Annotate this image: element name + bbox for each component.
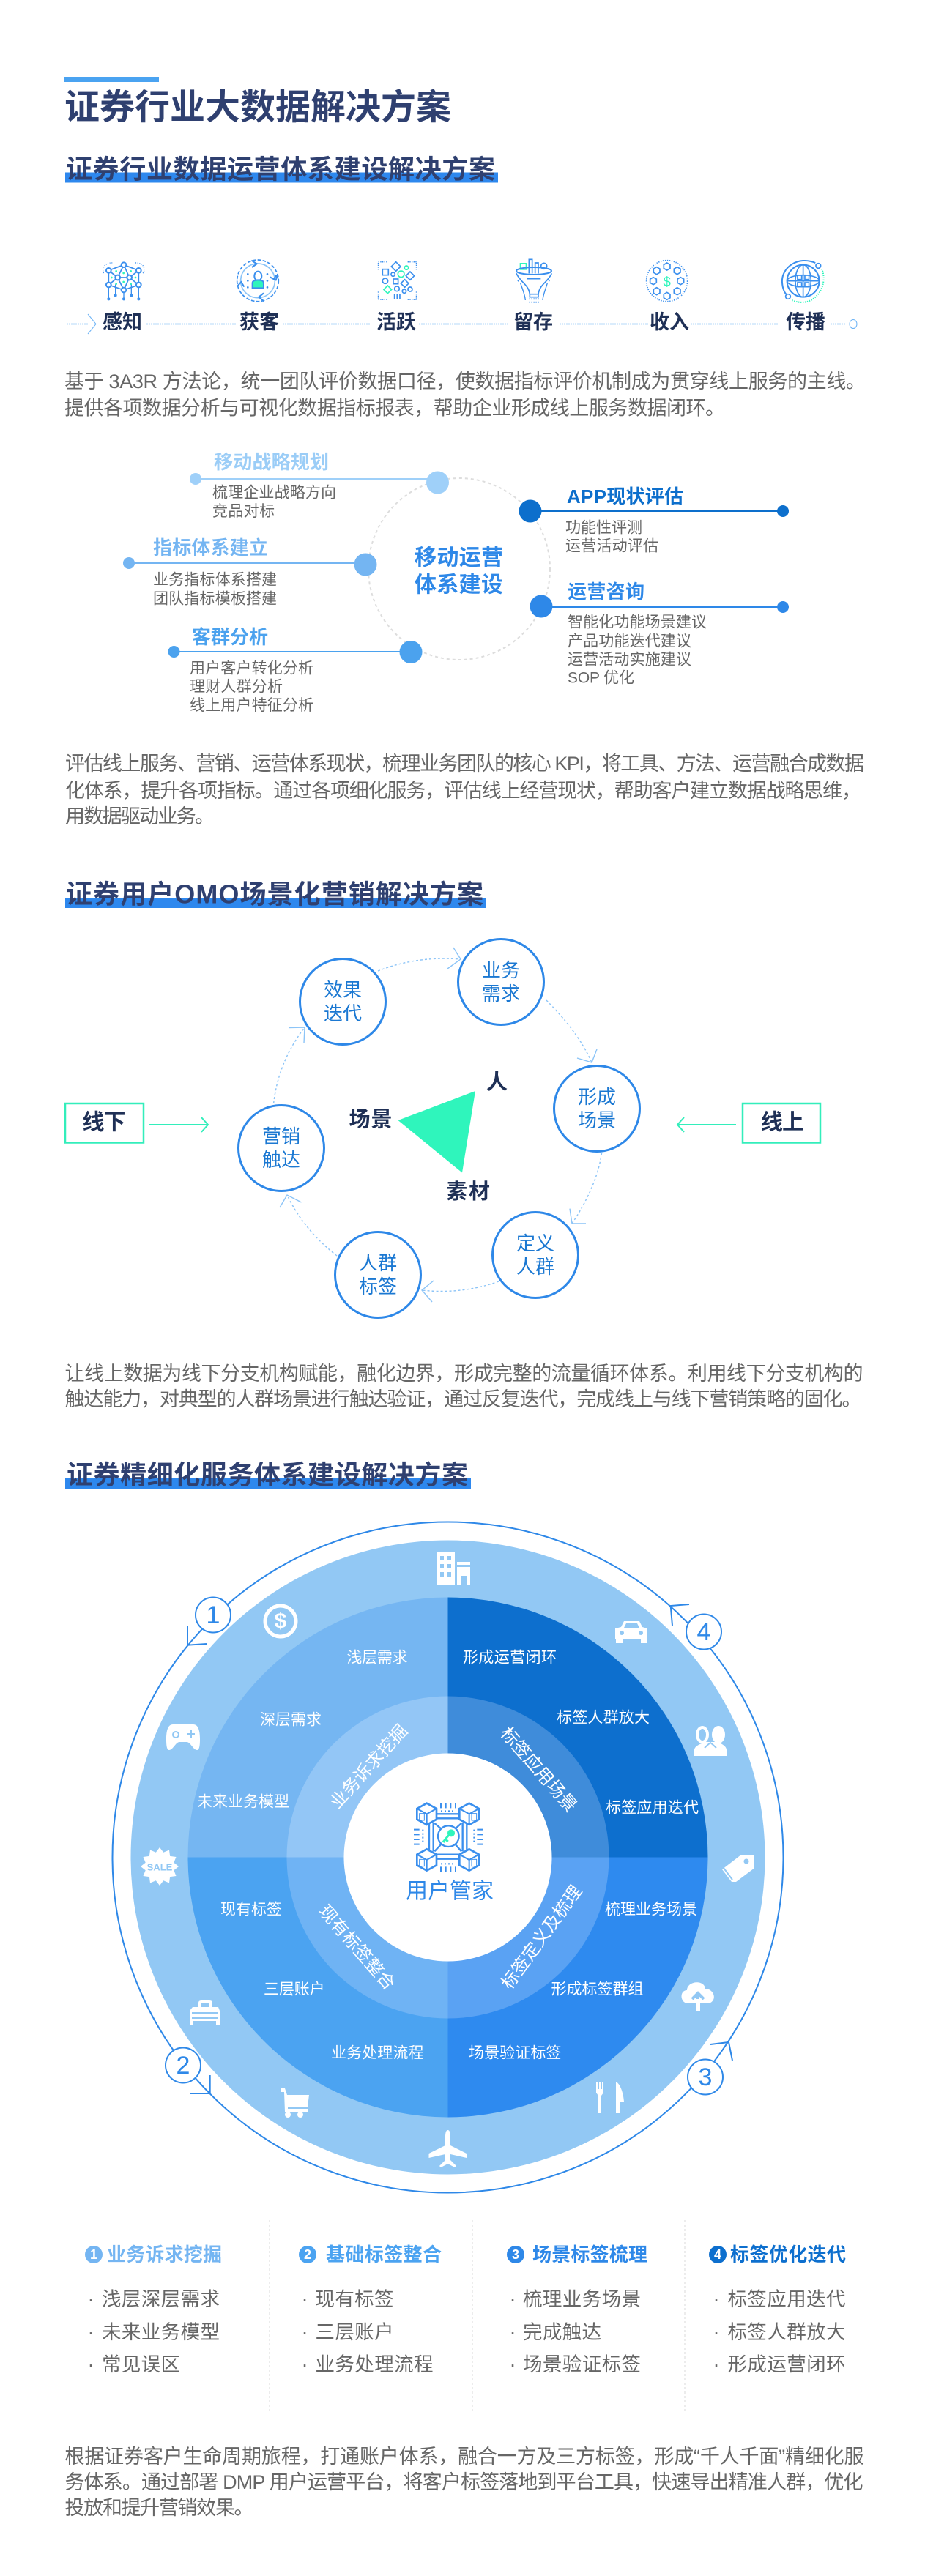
- offline box: 线下: [82, 1110, 126, 1135]
- center triangle: [398, 1091, 475, 1173]
- icon: cloud upload: [681, 1982, 714, 2011]
- white center: [344, 1753, 552, 1961]
- quadrant item labels: 标签应用迭代: [606, 1800, 699, 1816]
- step: 人群标签: 人群: [359, 1252, 397, 1274]
- column 4: ·: [713, 2288, 719, 2310]
- column 2: ·: [302, 2321, 308, 2343]
- step badge 2: 2: [177, 2052, 190, 2080]
- step: 形成场景: 场景: [578, 1109, 616, 1131]
- node: 移动战略规划: 竞品对标: [212, 503, 275, 520]
- column 3: ·: [510, 2321, 516, 2343]
- inner ring labels: [315, 1721, 586, 1994]
- quadrant item labels: 未来业务模型: [197, 1794, 289, 1810]
- icon: tag: [722, 1855, 754, 1882]
- node: 运营咨询: 产品功能迭代建议: [568, 633, 691, 650]
- column 4: [709, 2244, 846, 2375]
- node: 运营咨询: SOP 优化: [568, 669, 634, 687]
- center labels: [349, 1071, 508, 1204]
- step: 业务需求: 业务: [482, 959, 520, 981]
- node: 移动战略规划: [190, 451, 449, 520]
- node: APP现状评估: APP现状评估: [567, 485, 683, 507]
- node: APP现状评估: 运营活动评估: [565, 537, 658, 555]
- quadrant item labels: 形成运营闭环: [463, 1649, 557, 1667]
- step: 营销触达: 触达: [262, 1149, 300, 1171]
- column 2: ·: [302, 2288, 308, 2310]
- quadrant item labels: 浅层需求: [347, 1649, 407, 1667]
- quadrant item labels: 场景验证标签: [469, 2044, 561, 2062]
- dashed ring: [368, 478, 550, 660]
- icon: user cycle: [237, 260, 278, 302]
- node: APP现状评估: 功能性评测: [565, 520, 642, 536]
- inner ring labels: 标签应用场景: [497, 1724, 580, 1816]
- node: 指标体系建立: 团队指标模板搭建: [153, 590, 277, 608]
- column 4: 标签应用迭代: [728, 2288, 845, 2310]
- step: 效果迭代: 效果: [324, 979, 362, 1001]
- paragraph 4: 根据证券客户生命周期旅程，打通账户体系，融合一方及三方标签，形成“千人千面”精细化服: [64, 2446, 864, 2468]
- timeline dashed connector: [67, 314, 857, 334]
- step: 人群标签: 标签: [359, 1276, 397, 1298]
- column 1: [85, 2244, 222, 2375]
- icon: key hub: [414, 1803, 483, 1872]
- icon: activity shapes: [379, 262, 417, 299]
- outer ring line: [113, 1522, 784, 2192]
- icon: sale badge: SALE: [147, 1861, 173, 1873]
- cycle arrows: [274, 948, 602, 1302]
- column 2: 现有标签: [315, 2288, 394, 2310]
- icon: globe: [782, 261, 824, 302]
- node: 客群分析: 理财人群分析: [190, 678, 283, 696]
- inner ring labels: 现有标签整合: [315, 1902, 398, 1994]
- icon: sale badge: [141, 1847, 179, 1886]
- icon: data funnel: [516, 259, 551, 302]
- node: 移动战略规划: 梳理企业战略方向: [212, 485, 336, 501]
- node: 移动战略规划: 移动战略规划: [214, 451, 329, 473]
- column 1: ·: [88, 2321, 94, 2343]
- center label: [415, 546, 503, 598]
- step labels: 留存: [513, 311, 553, 333]
- center label: 用户管家: [406, 1879, 494, 1904]
- column 3: 场景标签梳理: [532, 2244, 647, 2266]
- column 1: 浅层深层需求: [102, 2288, 220, 2310]
- column 3: 梳理业务场景: [523, 2288, 641, 2310]
- center label: 移动运营: [415, 546, 503, 570]
- section heading 1: 证券行业数据运营体系建设解决方案: [66, 154, 495, 185]
- step: 营销触达: 营销: [262, 1125, 300, 1147]
- column 3: [507, 2244, 647, 2375]
- node: 运营咨询: 运营咨询: [568, 581, 644, 603]
- column 1: 1: [90, 2247, 97, 2262]
- column 2: ·: [302, 2353, 308, 2375]
- node: 指标体系建立: [123, 537, 376, 608]
- step labels: 获客: [239, 311, 279, 333]
- OMO cycle diagram: [65, 939, 820, 1318]
- column 3: 完成触达: [523, 2321, 601, 2343]
- column 2: 基础标签整合: [326, 2244, 442, 2266]
- step badge 4: 4: [697, 1618, 710, 1646]
- quadrant item labels: 业务处理流程: [331, 2044, 423, 2062]
- four column summary: [85, 2220, 846, 2413]
- column 4: 标签优化迭代: [730, 2244, 846, 2266]
- node: 运营咨询: 运营活动实施建议: [568, 652, 691, 668]
- column 4: 标签人群放大: [728, 2321, 845, 2343]
- step: 营销触达: [239, 1106, 324, 1191]
- node: 运营咨询: 智能化功能场景建议: [568, 614, 707, 631]
- node: 客群分析: 线上用户特征分析: [190, 697, 313, 714]
- column 2: [299, 2244, 442, 2375]
- paragraph 3: 让线上数据为线下分支机构赋能，融化边界，形成完整的流量循环体系。利用线下分支机构的: [64, 1363, 863, 1385]
- column 2: 业务处理流程: [315, 2353, 434, 2375]
- node: 客群分析: 客群分析: [192, 626, 268, 648]
- step badge 3: [688, 2059, 723, 2094]
- mobile operations diagram: [123, 451, 789, 714]
- column 4: ·: [713, 2321, 719, 2343]
- column 4: 4: [714, 2247, 721, 2262]
- column 4: 形成运营闭环: [728, 2353, 845, 2375]
- icon: bed: [190, 2000, 220, 2025]
- paragraph 1: [64, 371, 866, 419]
- ring: scenario band: [130, 1541, 765, 2175]
- quadrant blocks: [187, 1598, 707, 2118]
- node: APP现状评估: [519, 485, 789, 555]
- column 3: ·: [510, 2288, 516, 2310]
- node: 指标体系建立: 指标体系建立: [153, 537, 268, 559]
- step labels: 传播: [786, 311, 825, 333]
- center labels: 素材: [446, 1180, 490, 1204]
- step: 效果迭代: 迭代: [324, 1002, 362, 1024]
- step: 形成场景: 形成: [578, 1086, 616, 1108]
- paragraph 4: [64, 2446, 864, 2519]
- column 3: 场景验证标签: [523, 2353, 641, 2375]
- paragraph 3: 触达能力，对典型的人群场景进行触达验证，通过反复迭代，完成线上与线下营销策略的固化。: [64, 1388, 861, 1410]
- icon: people: [694, 1726, 727, 1756]
- paragraph 2: 用数据驱动业务。: [65, 805, 215, 827]
- offline box: [65, 1103, 144, 1142]
- column 3: ·: [510, 2353, 516, 2375]
- quadrant item labels: 现有标签: [220, 1901, 282, 1918]
- quadrant item labels: 深层需求: [260, 1712, 322, 1728]
- column 1: 未来业务模型: [102, 2321, 220, 2343]
- step: 定义人群: [492, 1213, 579, 1298]
- arrow: offline to cycle: [149, 1117, 208, 1132]
- quadrant item labels: 梳理业务场景: [605, 1901, 697, 1918]
- icon: car: [615, 1621, 647, 1643]
- quadrant item labels: 标签人群放大: [557, 1709, 650, 1727]
- column 1: ·: [88, 2353, 94, 2375]
- online box: [743, 1103, 820, 1142]
- node: 客群分析: [168, 626, 422, 714]
- concentric service wheel: [113, 1522, 784, 2192]
- step labels: 收入: [650, 311, 689, 333]
- step badge 3: 3: [699, 2063, 712, 2091]
- paragraph 2: 评估线上服务、营销、运营体系现状，梳理业务团队的核心 KPI，将工具、方法、运营融合成数据: [65, 753, 864, 775]
- paragraph 4: 投放和提升营销效果。: [64, 2497, 253, 2519]
- step: 定义人群: 定义: [516, 1232, 554, 1254]
- column 3: 3: [512, 2247, 519, 2262]
- main title: 证券行业大数据解决方案: [64, 88, 451, 127]
- section heading 3: 证券精细化服务体系建设解决方案: [67, 1460, 468, 1489]
- lifecycle row: 感知 获客 活跃 留存 收入 传播: [67, 259, 857, 334]
- step badge 1: [196, 1598, 231, 1633]
- section heading 2: 证券用户OMO场景化营销解决方案: [66, 879, 483, 909]
- icon: network: [103, 262, 144, 300]
- icon: revenue ring: $: [663, 274, 671, 289]
- column 2: 2: [304, 2247, 311, 2262]
- column 1: 常见误区: [102, 2353, 180, 2375]
- icon: fork and knife: [596, 2082, 624, 2113]
- step: 效果迭代: [300, 959, 385, 1044]
- online box: 线上: [761, 1110, 804, 1135]
- center labels: 人: [486, 1071, 508, 1094]
- step labels: [103, 310, 825, 333]
- arrow: online to cycle: [677, 1117, 736, 1132]
- center label: 体系建设: [415, 573, 503, 598]
- center labels: 场景: [349, 1107, 393, 1132]
- icon: plane: [429, 2130, 467, 2167]
- node: 客群分析: 用户客户转化分析: [190, 660, 313, 677]
- icon: gamepad: [166, 1724, 200, 1750]
- column 1: 业务诉求挖掘: [107, 2244, 222, 2266]
- quadrant item labels: 三层账户: [264, 1981, 325, 1998]
- icon: revenue ring: [647, 261, 688, 302]
- step badge 1: 1: [207, 1601, 220, 1629]
- column 2: 三层账户: [315, 2321, 394, 2343]
- icon: building: [437, 1552, 470, 1585]
- icon: dollar: [265, 1606, 296, 1637]
- column 1: ·: [88, 2288, 94, 2310]
- ring arrowheads: [187, 1604, 732, 2093]
- quadrant item labels: 形成标签群组: [551, 1981, 643, 1998]
- step labels: 感知: [103, 310, 142, 333]
- paragraph 1: 基于 3A3R 方法论，统一团队评价数据口径，使数据指标评价机制成为贯穿线上服务的主线。: [64, 371, 866, 392]
- icon: dollar: $: [275, 1609, 287, 1633]
- quadrant item labels: [197, 1649, 699, 2062]
- paragraph 3: [64, 1363, 863, 1410]
- step: 形成场景: [554, 1066, 640, 1151]
- node: 运营咨询: [530, 581, 789, 687]
- inner ring labels: 标签定义及梳理: [498, 1882, 586, 1993]
- step: 业务需求: [458, 939, 543, 1025]
- paragraph 4: 务体系。通过部署 DMP 用户运营平台，将客户标签落地到平台工具，快速导出精准人群，优化: [64, 2471, 863, 2493]
- step: 业务需求: 需求: [482, 983, 520, 1005]
- paragraph 2: [65, 753, 864, 827]
- paragraph 1: 提供各项数据分析与可视化数据指标报表，帮助企业形成线上服务数据闭环。: [64, 397, 725, 419]
- title accent bar: [64, 77, 159, 82]
- step badge 4: [686, 1614, 721, 1649]
- inner ring labels: 业务诉求挖掘: [327, 1721, 412, 1813]
- node: 指标体系建立: 业务指标体系搭建: [153, 571, 277, 589]
- column 4: ·: [713, 2353, 719, 2375]
- paragraph 2: 化体系，提升各项指标。通过各项细化服务，评估线上经营现状，帮助客户建立数据战略思维，: [65, 780, 861, 802]
- step labels: 活跃: [376, 311, 416, 333]
- step: 人群标签: [335, 1232, 420, 1318]
- icon: shopping cart: [281, 2088, 309, 2118]
- step badge 2: [166, 2047, 201, 2082]
- step: 定义人群: 人群: [516, 1256, 554, 1278]
